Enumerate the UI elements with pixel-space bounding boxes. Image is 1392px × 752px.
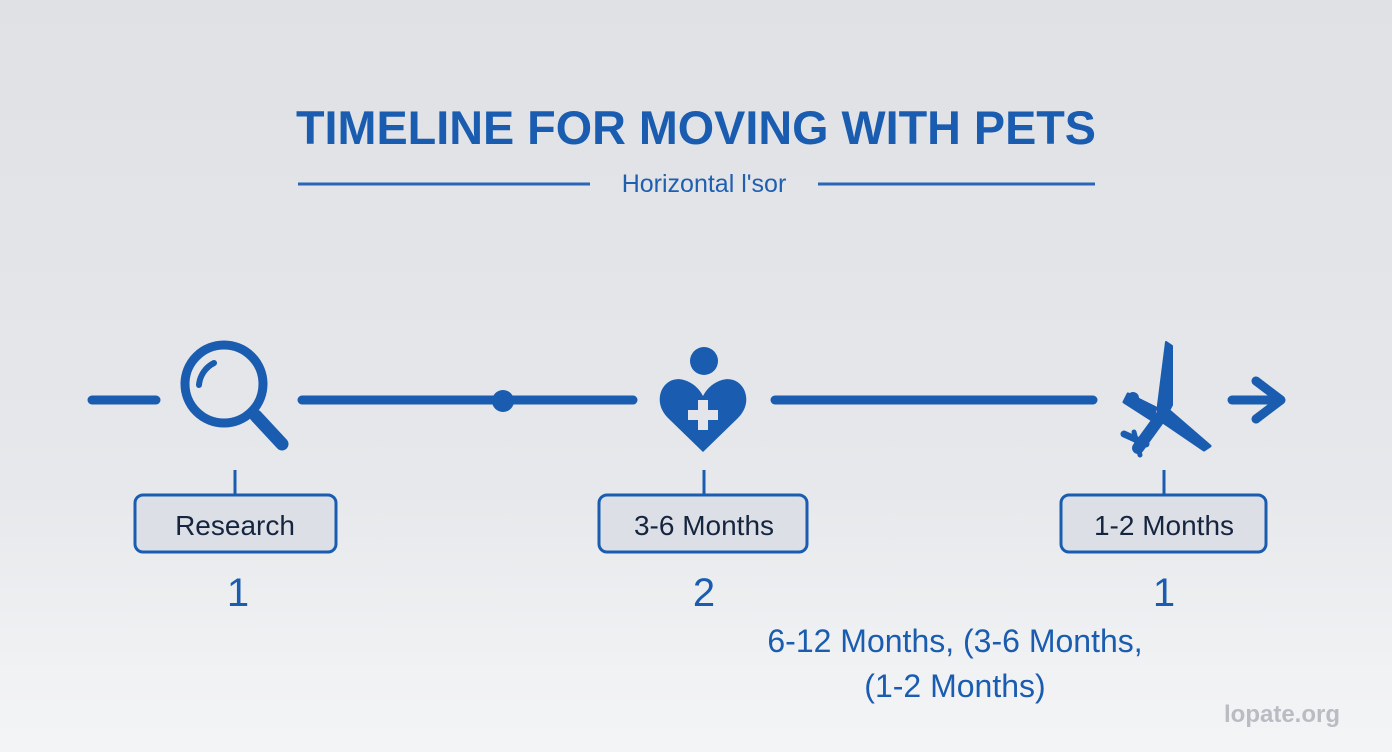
stage 1: Research: 1 <box>227 571 249 615</box>
stage 1: Research: Research <box>175 510 295 541</box>
subtitle with rules: Horizontal Ɩ'sor <box>622 170 786 198</box>
stage 2: 3-6 Months: 2 <box>693 571 715 615</box>
icon: airplane <box>1124 342 1210 455</box>
watermark: lopate.org <box>1224 701 1340 728</box>
caption: (1-2 Months) <box>864 668 1046 704</box>
title: TIMELINE FOR MOVING WITH PETS <box>296 101 1096 154</box>
timeline line <box>92 390 1093 412</box>
stage 2: 3-6 Months: 3-6 Months <box>634 510 774 541</box>
stage 1: Research <box>135 470 336 615</box>
stage 2: 3-6 Months <box>599 470 807 615</box>
caption: 6-12 Months, (3-6 Months, <box>767 623 1143 659</box>
icon: magnifier <box>169 0 282 444</box>
stage 3: 1-2 Months: 1-2 Months <box>1094 510 1234 541</box>
stage 3: 1-2 Months <box>1061 470 1266 615</box>
arrow <box>1232 381 1281 419</box>
caption <box>767 623 1143 704</box>
stage 3: 1-2 Months: 1 <box>1153 571 1175 615</box>
icon: heart with cross <box>660 347 746 452</box>
